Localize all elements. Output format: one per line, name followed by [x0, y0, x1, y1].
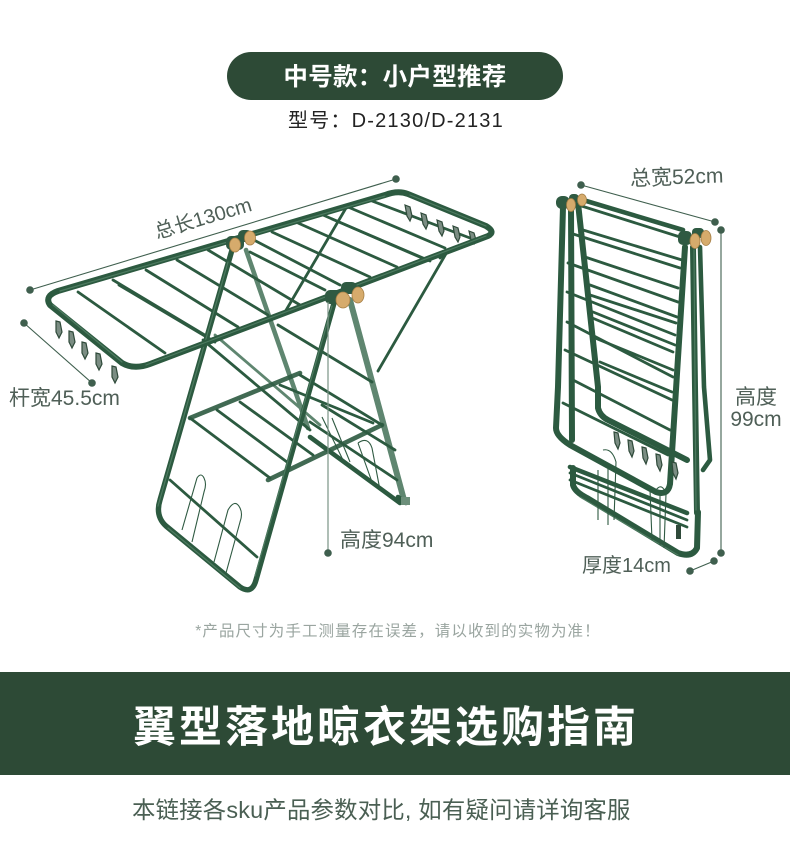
- hanging bars on top: [78, 201, 470, 353]
- left clip row: [56, 321, 118, 383]
- folded drying rack: [556, 194, 711, 555]
- top frame: [48, 192, 492, 367]
- guide banner: 翼型落地晾衣架选购指南: [133, 704, 639, 752]
- dimension: folded height: [717, 226, 782, 557]
- dimension: height 94: 高度94cm: [340, 529, 433, 552]
- dimension: bar width: [9, 319, 120, 410]
- title pill: [227, 52, 563, 100]
- folded clips: [614, 432, 678, 479]
- dimension: folded width: [577, 164, 724, 226]
- guide banner: [0, 672, 790, 775]
- dimension: bar width: 杆宽45.5cm: [9, 387, 120, 410]
- folded shelf: [570, 450, 687, 548]
- wooden pivot right: [325, 282, 364, 308]
- rear legs: [246, 250, 410, 505]
- dimension: folded thickness: 厚度14cm: [582, 554, 671, 577]
- folded legs: [556, 203, 710, 555]
- dimension: total length: 总长130cm: [152, 193, 254, 244]
- dimension: folded height: 高度: [735, 386, 777, 409]
- guide subtitle: 本链接各sku产品参数对比, 如有疑问请详询客服: [132, 797, 631, 823]
- expanded drying rack: [48, 192, 492, 590]
- rear shoe wires: [322, 417, 380, 490]
- wooden pivot left: [226, 230, 256, 252]
- measurement disclaimer: *产品尺寸为手工测量存在误差，请以收到的实物为准！: [195, 622, 601, 640]
- lower shelf: [190, 373, 397, 480]
- front shoe rack: [170, 475, 257, 573]
- dimension: total length: [26, 175, 400, 294]
- right clip row: [405, 205, 476, 244]
- dimension: folded thickness: [582, 554, 718, 577]
- folded bars: [563, 203, 682, 455]
- folded top pivots: [556, 194, 711, 248]
- dimension: height 94: [324, 302, 433, 557]
- title pill: 中号款：小户型推荐: [283, 63, 507, 91]
- dimension: folded width: 总宽52cm: [630, 164, 724, 191]
- front U frame: [158, 250, 336, 590]
- dimension: folded height: 99cm: [730, 408, 782, 431]
- model number: 型号：D-2130/D-2131: [288, 109, 504, 132]
- cross braces: [203, 208, 447, 430]
